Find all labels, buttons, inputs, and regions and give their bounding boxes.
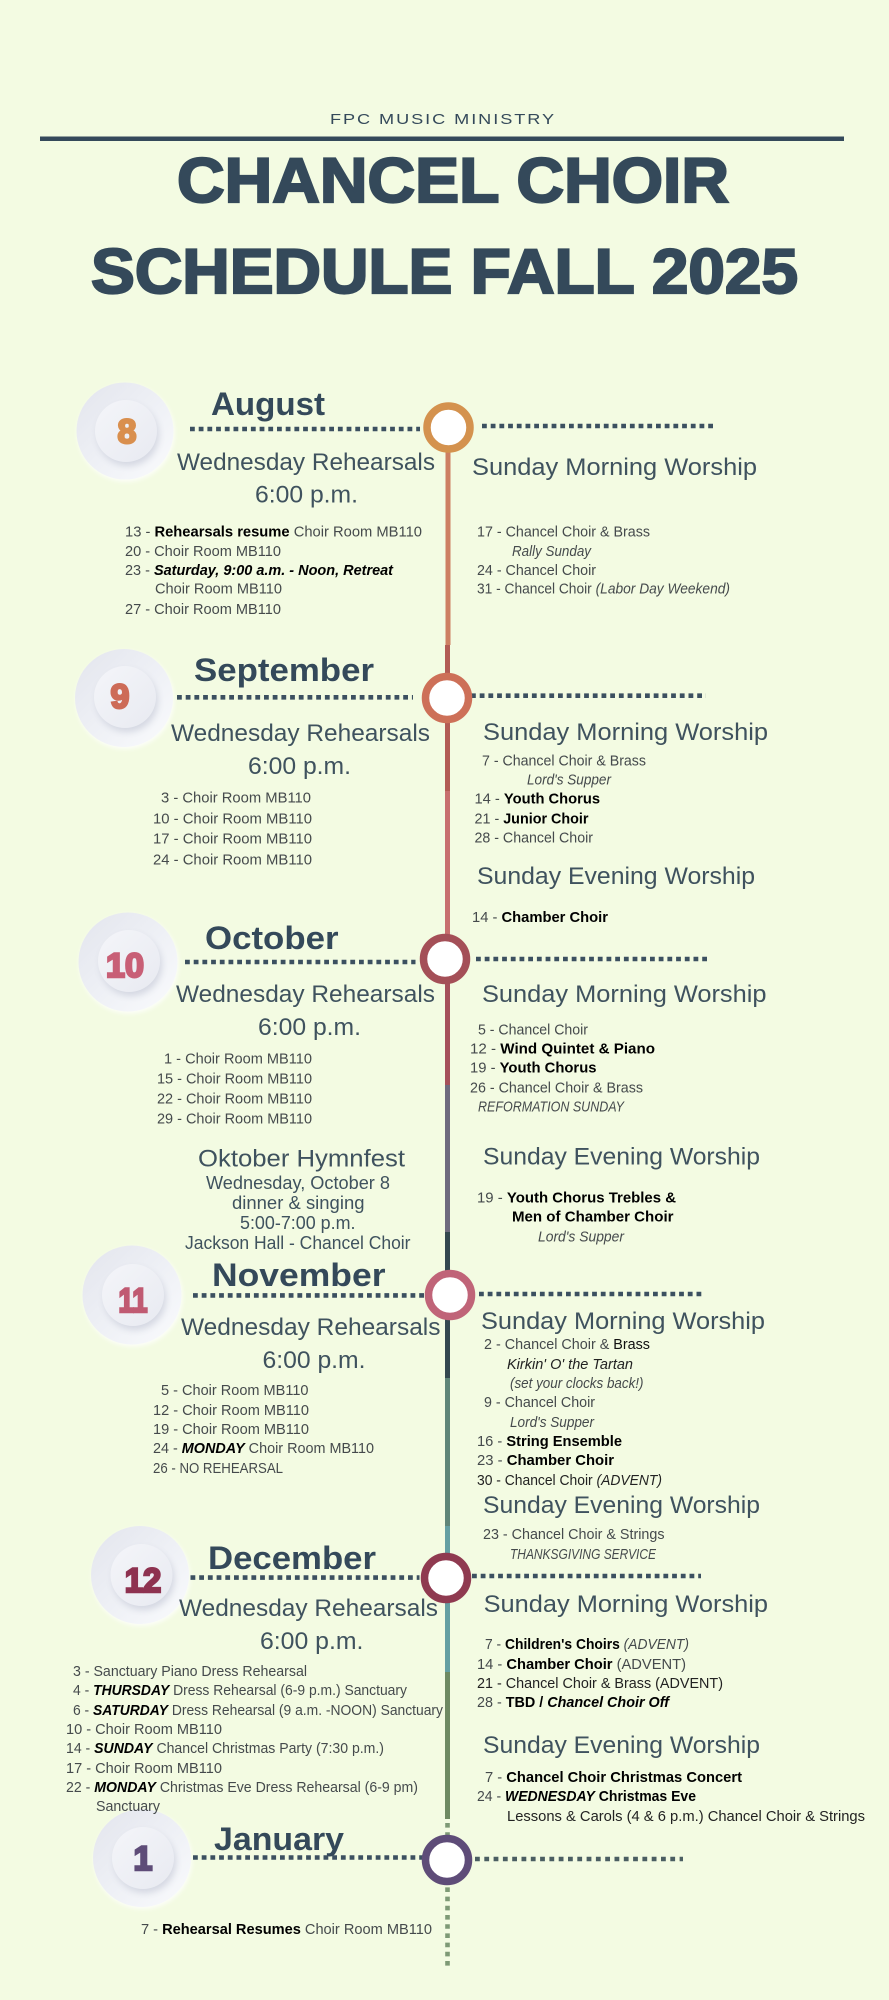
badge: 12 — [91, 1526, 189, 1624]
badge: 11 — [82, 1246, 182, 1344]
worship list: 21 - Chancel Choir & Brass (ADVENT) — [477, 1676, 723, 1692]
rehearsals heading — [177, 449, 435, 508]
worship list: 28 - Chancel Choir — [474, 831, 593, 847]
rehearsals heading: 6:00 p.m. — [260, 1628, 363, 1655]
badge: 8 — [76, 382, 174, 480]
evening worship heading: Sunday Evening Worship — [483, 1492, 760, 1519]
connector dots — [190, 426, 713, 429]
badge: 10 — [78, 912, 178, 1012]
worship list: Rally Sunday — [512, 544, 593, 560]
rehearsal list: 24 - MONDAY Choir Room MB110 — [153, 1441, 374, 1457]
connector dots — [190, 1576, 701, 1578]
rehearsals heading: Wednesday Rehearsals — [171, 720, 430, 747]
timeline node — [427, 406, 470, 449]
rehearsals heading — [171, 720, 430, 780]
rehearsals heading: 6:00 p.m. — [255, 482, 358, 508]
evening worship list: Lord's Supper — [538, 1229, 625, 1245]
evening worship heading: Sunday Evening Worship — [483, 1732, 760, 1759]
callout: Oktober Hymnfest — [185, 1146, 411, 1253]
rehearsals heading: Wednesday Rehearsals — [181, 1314, 440, 1341]
evening worship list: Lessons & Carols (4 & 6 p.m.) Chancel Choir & Strings — [507, 1809, 865, 1825]
rehearsal list: 22 - MONDAY Christmas Eve Dress Rehearsal (6-9 pm) — [66, 1780, 418, 1796]
rehearsal list: 5 - Choir Room MB110 — [161, 1383, 308, 1399]
rehearsal list: Choir Room MB110 — [155, 582, 282, 598]
evening worship heading: Sunday Evening Worship — [483, 1144, 760, 1171]
evening worship list — [483, 1527, 664, 1563]
rehearsal list: 17 - Choir Room MB110 — [153, 832, 312, 848]
worship list — [477, 1637, 723, 1711]
timeline node — [426, 1838, 468, 1882]
worship list: 2 - Chancel Choir & Brass — [484, 1337, 650, 1353]
worship list: Kirkin' O' the Tartan — [507, 1357, 633, 1373]
timeline node — [424, 938, 466, 980]
worship heading: Sunday Morning Worship — [482, 981, 766, 1008]
evening worship list: 23 - Chancel Choir & Strings — [483, 1527, 664, 1543]
worship heading: Sunday Morning Worship — [483, 719, 768, 746]
evening worship list: 14 - Chamber Choir — [472, 910, 608, 926]
callout: Oktober Hymnfest: Jackson Hall - Chancel Choir — [185, 1233, 411, 1253]
rehearsal list: 23 - Saturday, 9:00 a.m. - Noon, Retreat — [125, 563, 394, 579]
rehearsal list: 3 - Choir Room MB110 — [161, 791, 311, 807]
worship heading: Sunday Morning Worship — [472, 454, 757, 481]
badge: 1 — [93, 1809, 191, 1907]
worship list: 12 - Wind Quintet & Piano — [470, 1042, 655, 1058]
worship list: 17 - Chancel Choir & Brass — [477, 524, 650, 540]
worship list — [470, 1022, 655, 1116]
badge: 9: 9 — [111, 678, 129, 716]
worship list: 5 - Chancel Choir — [478, 1022, 588, 1038]
month heading: September — [194, 652, 374, 688]
month panel: November — [82, 1246, 765, 1563]
rehearsal list: 27 - Choir Room MB110 — [125, 602, 281, 618]
callout: Oktober Hymnfest: Wednesday, October 8 — [206, 1173, 390, 1193]
worship list: 28 - TBD / Chancel Choir Off — [477, 1695, 671, 1711]
rehearsals heading — [181, 1314, 440, 1374]
badge: 8: 8 — [118, 413, 136, 451]
rehearsal list: 24 - Choir Room MB110 — [153, 853, 312, 869]
rehearsal list: 17 - Choir Room MB110 — [66, 1761, 222, 1777]
callout: Oktober Hymnfest: Oktober Hymnfest — [198, 1146, 405, 1173]
badge: 1: 1 — [134, 1840, 152, 1878]
rehearsal note: 7 - Rehearsal Resumes Choir Room MB110 — [141, 1922, 432, 1938]
evening worship list: 19 - Youth Chorus Trebles & — [477, 1191, 676, 1207]
worship list — [477, 1337, 662, 1489]
worship heading: Sunday Morning Worship — [481, 1308, 765, 1335]
timeline node — [426, 676, 468, 720]
connector dots — [193, 1858, 683, 1859]
evening worship list: 24 - WEDNESDAY Christmas Eve — [477, 1789, 696, 1805]
month heading: August — [211, 386, 325, 422]
evening worship list: THANKSGIVING SERVICE — [510, 1547, 656, 1563]
badge: 10: 10 — [106, 947, 144, 985]
worship list: 14 - Youth Chorus — [474, 792, 600, 808]
evening worship list — [477, 1770, 865, 1825]
badge: 11: 11 — [118, 1282, 148, 1320]
rehearsal list — [157, 1052, 312, 1128]
worship list: 23 - Chamber Choir — [477, 1453, 614, 1469]
rehearsal list: 29 - Choir Room MB110 — [157, 1112, 312, 1128]
connector dots — [185, 959, 709, 962]
rehearsal list: 1 - Choir Room MB110 — [164, 1052, 312, 1068]
worship list: (set your clocks back!) — [510, 1376, 644, 1392]
rehearsal list: 13 - Rehearsals resume Choir Room MB110 — [125, 524, 422, 540]
rehearsals heading: 6:00 p.m. — [258, 1014, 361, 1041]
evening worship list: Men of Chamber Choir — [512, 1209, 674, 1225]
badge: 12: 12 — [125, 1562, 161, 1600]
rehearsal list: 12 - Choir Room MB110 — [153, 1403, 309, 1419]
connector dots — [193, 1294, 705, 1295]
header rule — [40, 136, 844, 141]
rehearsals heading: 6:00 p.m. — [262, 1347, 366, 1374]
worship list: REFORMATION SUNDAY — [478, 1100, 625, 1116]
rehearsal list: 14 - SUNDAY Chancel Christmas Party (7:30 p.m.) — [66, 1741, 384, 1757]
worship list: 16 - String Ensemble — [477, 1434, 622, 1450]
month panel: August — [76, 382, 757, 618]
month heading: November — [212, 1257, 386, 1293]
worship list: 31 - Chancel Choir (Labor Day Weekend) — [477, 582, 730, 598]
evening worship heading: Sunday Evening Worship — [477, 863, 755, 890]
timeline node — [424, 1556, 468, 1600]
rehearsal list: Sanctuary — [96, 1799, 161, 1815]
month panel: December — [66, 1526, 865, 1825]
rehearsals heading — [176, 981, 435, 1041]
worship list — [477, 524, 730, 598]
worship list: 7 - Children's Choirs (ADVENT) — [485, 1637, 689, 1653]
worship list: 24 - Chancel Choir — [477, 563, 596, 579]
rehearsal list: 22 - Choir Room MB110 — [157, 1092, 312, 1108]
worship list: 9 - Chancel Choir — [484, 1395, 595, 1411]
rehearsal list: 10 - Choir Room MB110 — [66, 1722, 222, 1738]
badge: 9 — [75, 649, 173, 747]
rehearsals heading: Wednesday Rehearsals — [179, 1595, 438, 1622]
title: CHANCEL CHOIR — [177, 146, 729, 216]
evening worship list: 7 - Chancel Choir Christmas Concert — [485, 1770, 742, 1786]
rehearsal list: 4 - THURSDAY Dress Rehearsal (6-9 p.m.) Sanctuary — [73, 1683, 408, 1699]
month panel: October — [78, 912, 766, 1253]
rehearsal list: 15 - Choir Room MB110 — [157, 1072, 312, 1088]
month panel: January — [93, 1809, 683, 1938]
worship list: Lord's Supper — [510, 1415, 595, 1431]
rehearsals heading: 6:00 p.m. — [248, 753, 351, 780]
rehearsal list — [153, 791, 312, 869]
worship list — [474, 754, 646, 847]
timeline vertical line — [445, 450, 450, 1966]
header eyebrow: FPC Music Ministry: FPC MUSIC MINISTRY — [330, 111, 556, 128]
worship list: 21 - Junior Choir — [474, 812, 589, 828]
rehearsal list — [153, 1383, 374, 1477]
month panel: September — [75, 649, 768, 926]
rehearsal list: 6 - SATURDAY Dress Rehearsal (9 a.m. -NOON) Sanctuary — [73, 1703, 444, 1719]
rehearsals heading — [179, 1595, 438, 1655]
worship heading: Sunday Morning Worship — [484, 1591, 768, 1618]
worship list: 26 - Chancel Choir & Brass — [470, 1080, 643, 1096]
connector dots — [177, 696, 706, 697]
rehearsal list: 19 - Choir Room MB110 — [153, 1422, 309, 1438]
evening worship list — [477, 1191, 676, 1245]
month heading: December — [208, 1540, 376, 1576]
worship list: 30 - Chancel Choir (ADVENT) — [477, 1473, 662, 1489]
worship list: 7 - Chancel Choir & Brass — [482, 754, 646, 770]
rehearsals heading: Wednesday Rehearsals — [176, 981, 435, 1008]
rehearsal list — [125, 524, 422, 618]
callout: Oktober Hymnfest: dinner & singing — [232, 1193, 364, 1213]
title: SCHEDULE FALL 2025 — [91, 237, 798, 307]
rehearsal list: 10 - Choir Room MB110 — [153, 812, 312, 828]
worship list: 14 - Chamber Choir (ADVENT) — [477, 1657, 686, 1673]
worship list: 19 - Youth Chorus — [470, 1060, 596, 1076]
rehearsal list: 3 - Sanctuary Piano Dress Rehearsal — [73, 1664, 307, 1680]
rehearsals heading: Wednesday Rehearsals — [177, 449, 435, 476]
timeline node — [428, 1274, 472, 1316]
rehearsal list: 20 - Choir Room MB110 — [125, 544, 281, 560]
month heading: January — [214, 1821, 344, 1857]
rehearsal list — [66, 1664, 444, 1815]
worship list: Lord's Supper — [527, 773, 612, 789]
title — [91, 146, 798, 307]
callout: Oktober Hymnfest: 5:00-7:00 p.m. — [240, 1213, 356, 1233]
rehearsal list: 26 - NO REHEARSAL — [153, 1461, 283, 1477]
month heading: October — [205, 920, 338, 956]
